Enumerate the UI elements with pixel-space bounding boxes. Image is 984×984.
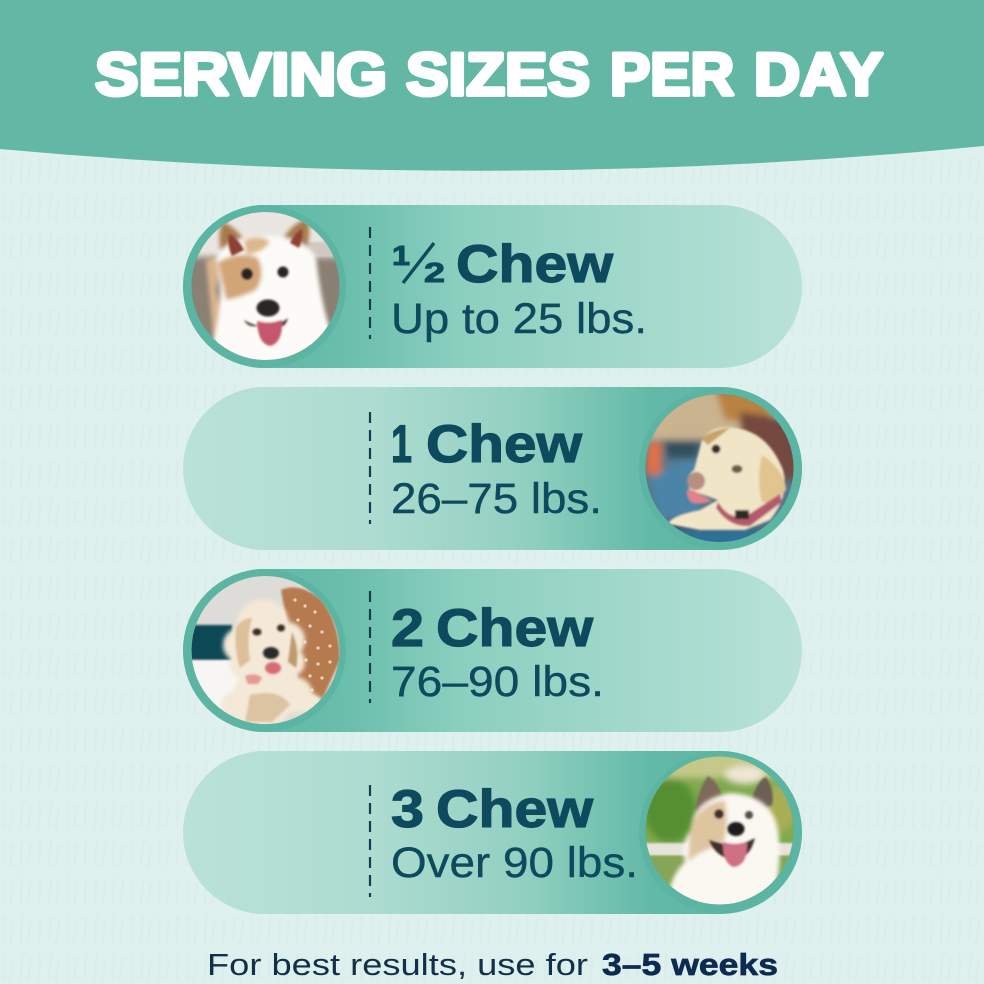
photo: fluffy dog in garden [646,756,794,904]
photo: curly doodle [190,575,342,730]
title: PER [610,41,734,108]
header banner [0,0,984,171]
label: half chew: 1 [392,240,410,271]
label: one chew: Chew [426,415,583,474]
dashed divider 3 [369,591,371,703]
label: half chew: 2 [424,257,445,288]
label: two chew [391,599,604,706]
panel: three chew [183,751,802,914]
label: one chew: 1 [391,415,412,474]
panel: two chew [183,569,802,732]
label: three chew: Chew [436,780,594,839]
title: SIZES [406,41,590,108]
label: half chew: Chew [456,235,614,294]
label: two chew: 76–90 lbs. [391,658,604,706]
label: two chew: 2 [391,599,424,658]
label: one chew: 26–75 lbs. [391,475,602,523]
photo: white and tan dog [192,212,340,360]
dashed divider 1 [369,227,371,339]
photo: yellow labrador [646,394,794,542]
title: SERVING [95,41,387,108]
footer note: For best results, use for [207,947,588,982]
label: three chew [391,780,638,887]
label: half chew: Up to 25 lbs. [391,295,647,343]
label: three chew: 3 [391,780,424,839]
label: three chew: Over 90 lbs. [391,839,638,887]
footer note: 3–5 weeks [602,947,778,982]
title: DAY [754,41,883,108]
panel: one chew [183,387,802,550]
dashed divider 2 [369,412,371,524]
panel: half chew [183,205,802,368]
label: half chew [391,235,647,343]
label: two chew: Chew [436,599,594,658]
label: one chew [391,415,602,523]
dashed divider 4 [369,785,371,897]
